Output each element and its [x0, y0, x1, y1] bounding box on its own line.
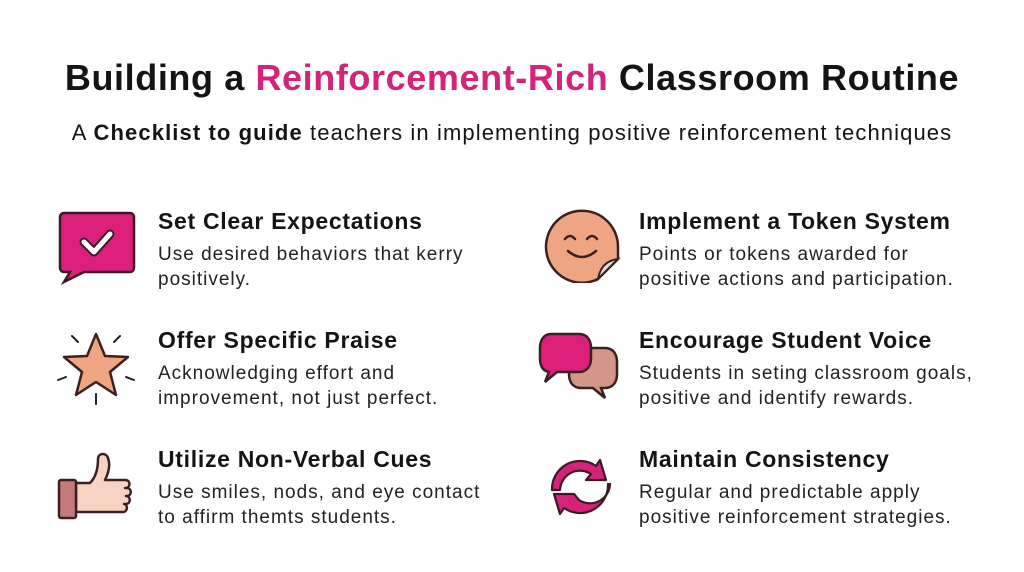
- item: set clear expectations: [158, 208, 464, 290]
- item: offer specific praise: improvement, not just perfect.: [158, 388, 438, 409]
- item: set clear expectations: Set Clear Expectations: [158, 208, 423, 234]
- item: token system: [639, 208, 954, 290]
- title: Building a Reinforcement-Rich Classroom Routine: [65, 57, 959, 98]
- item: token system: positive actions and participation.: [639, 269, 954, 290]
- item: non-verbal cues: [158, 446, 480, 528]
- item: consistency: [639, 446, 952, 528]
- subtitle: A Checklist to guide teachers in implementing positive reinforcement techniques: [72, 120, 952, 145]
- item: token system: Points or tokens awarded for: [639, 244, 909, 265]
- item: student voice: Students in seting classroom goals,: [639, 363, 973, 384]
- item: token system: Implement a Token System: [639, 208, 951, 234]
- item: offer specific praise: Acknowledging effort and: [158, 363, 395, 384]
- icon: star: [57, 332, 135, 405]
- item: consistency: positive reinforcement strategies.: [639, 507, 952, 528]
- item: offer specific praise: [158, 327, 438, 409]
- item: non-verbal cues: Utilize Non-Verbal Cues: [158, 446, 432, 472]
- item: set clear expectations: positively.: [158, 269, 251, 290]
- item: set clear expectations: Use desired behaviors that kerry: [158, 244, 464, 265]
- item: student voice: positive and identify rewards.: [639, 388, 914, 409]
- item: student voice: Encourage Student Voice: [639, 327, 932, 353]
- item: non-verbal cues: Use smiles, nods, and eye contact: [158, 482, 480, 503]
- icon: refresh arrows: [550, 458, 612, 516]
- item: student voice: [639, 327, 973, 409]
- icon: smiley sticker: [544, 210, 621, 283]
- item: offer specific praise: Offer Specific Praise: [158, 327, 398, 353]
- item: consistency: Maintain Consistency: [639, 446, 889, 472]
- icon: chat bubbles: [538, 332, 618, 399]
- icon: speech bubble check: [58, 212, 136, 285]
- item: non-verbal cues: to affirm themts students.: [158, 507, 397, 528]
- icon: thumbs up: [58, 452, 132, 520]
- item: consistency: Regular and predictable apply: [639, 482, 920, 503]
